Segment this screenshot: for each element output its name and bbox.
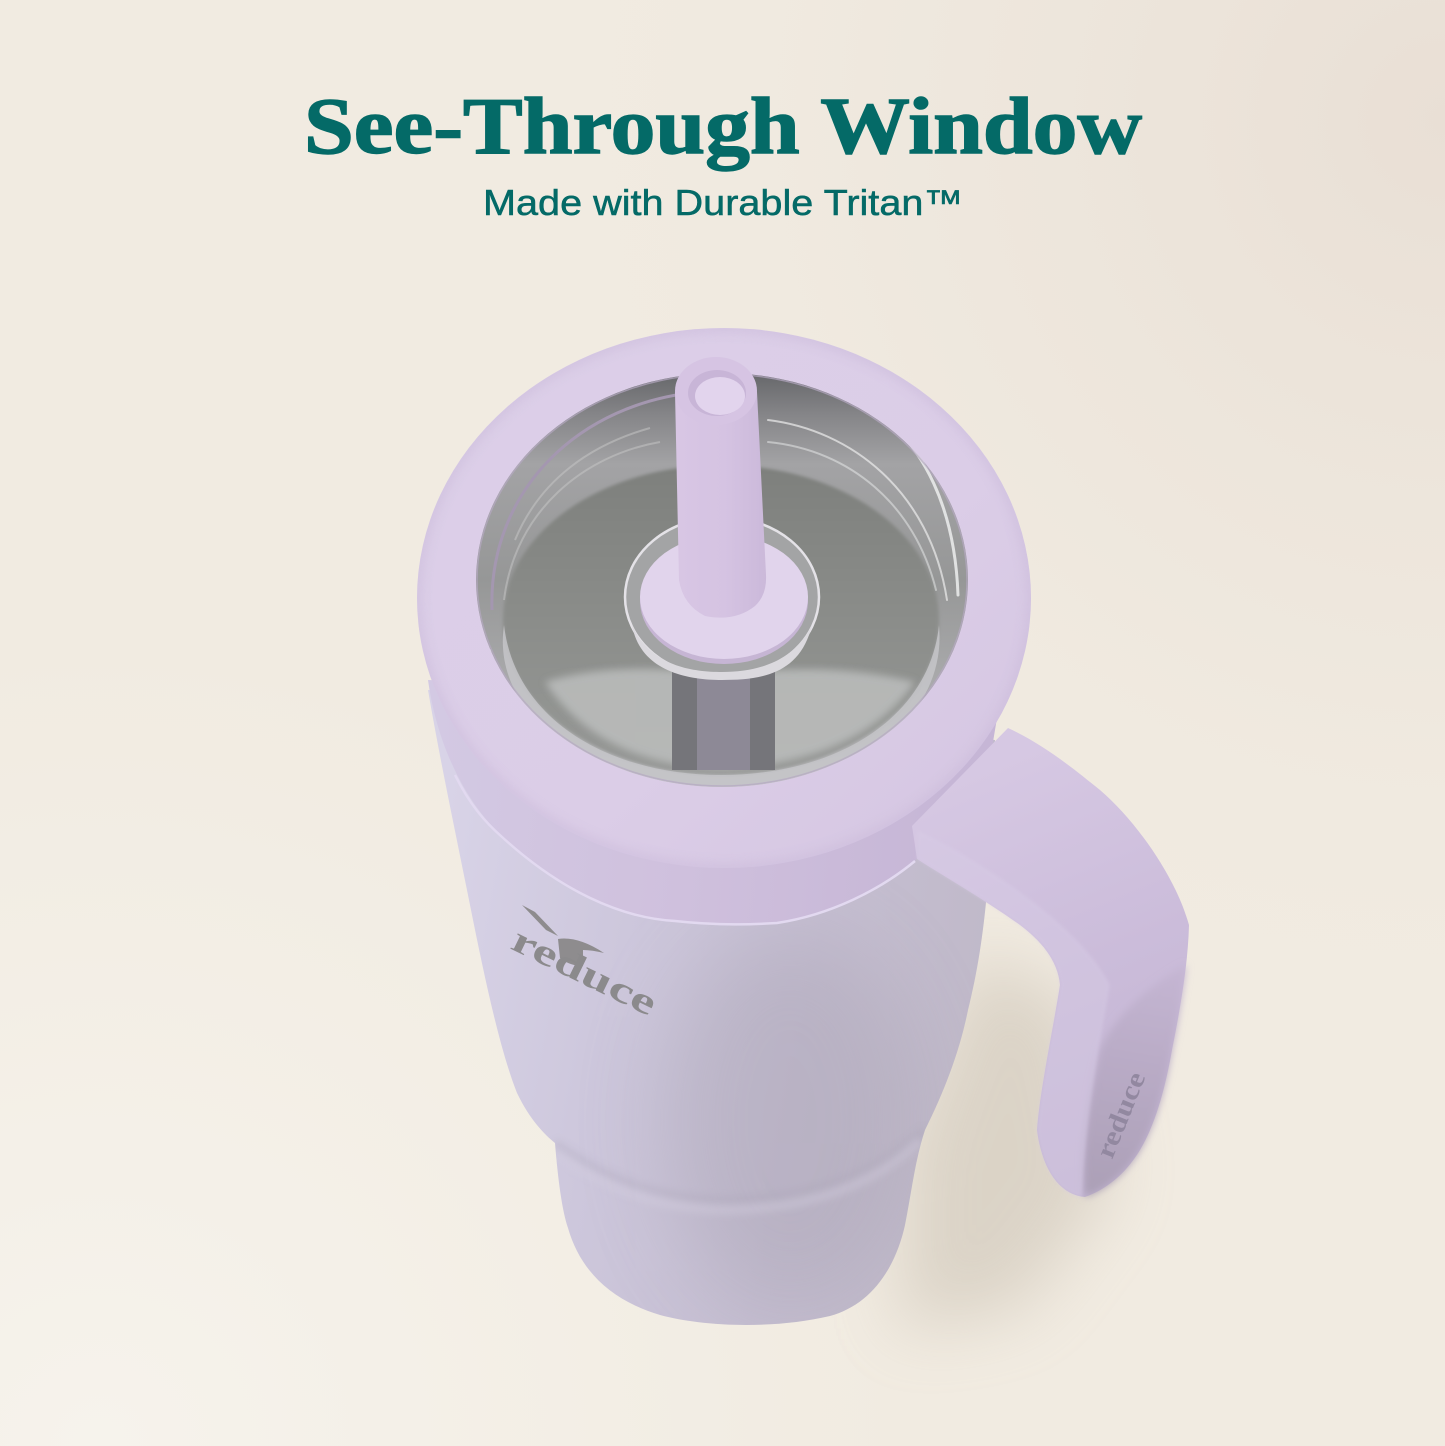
floor light patch xyxy=(545,669,915,769)
subtitle: Made with Durable Tritan™ xyxy=(483,182,963,223)
straw gasket xyxy=(625,517,819,680)
handle: reduce xyxy=(1090,1068,1151,1162)
reduce logo xyxy=(505,905,663,1024)
window lower edge xyxy=(503,625,940,790)
right glass streaks xyxy=(490,376,960,680)
collar edge line xyxy=(455,775,915,924)
body shading xyxy=(558,951,925,1288)
glass window xyxy=(476,373,968,790)
handle xyxy=(912,728,1189,1197)
reduce logo: reduce xyxy=(505,919,663,1024)
straw reflection xyxy=(672,665,775,770)
tumbler xyxy=(417,328,1189,1325)
title: See-Through Window xyxy=(304,83,1142,171)
tumbler body xyxy=(428,690,995,1325)
straw xyxy=(675,357,766,618)
inner floor xyxy=(503,465,939,775)
left inner arcs xyxy=(504,428,660,600)
lid collar xyxy=(428,680,1000,924)
cast shadow xyxy=(900,950,1110,1330)
lid rim xyxy=(417,328,1031,868)
left glass arcs xyxy=(490,394,676,610)
